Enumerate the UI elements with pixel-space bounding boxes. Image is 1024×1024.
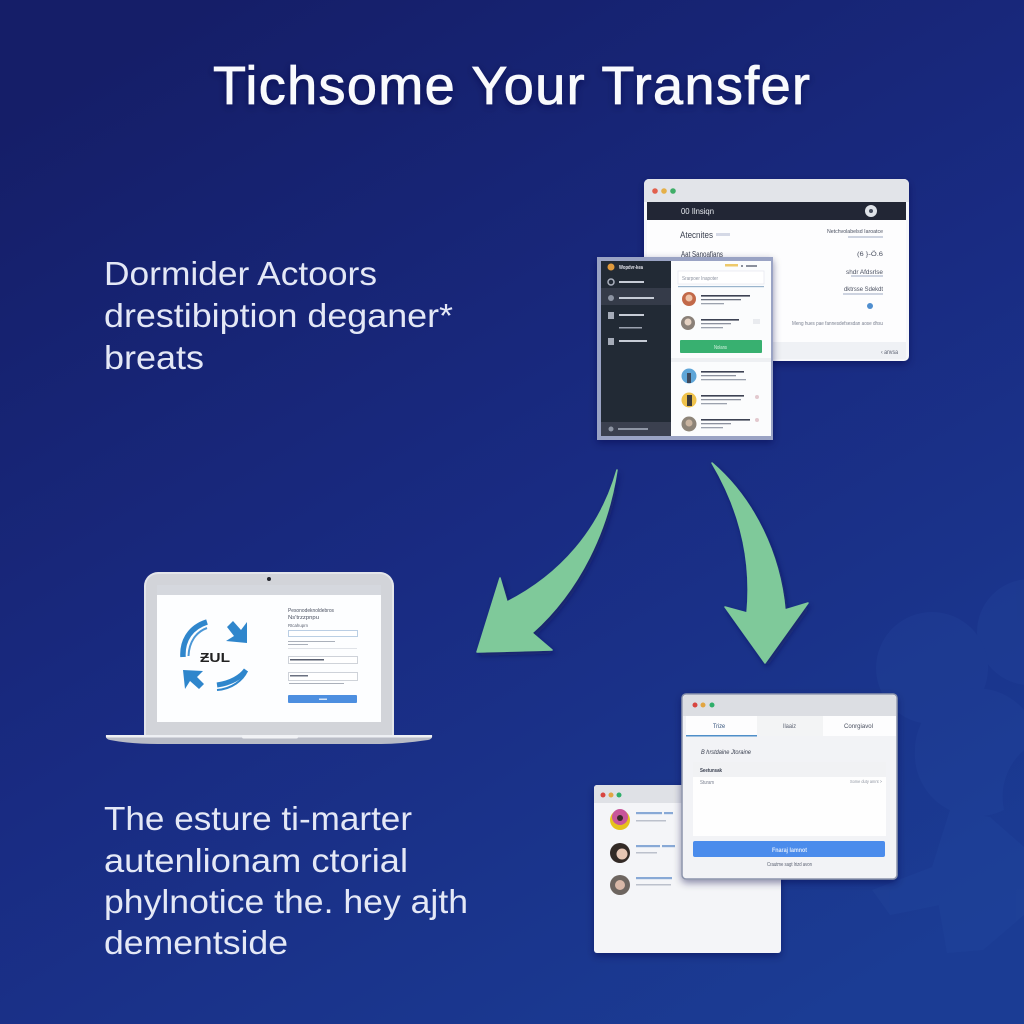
front app window with dark sidebar [597,257,773,440]
tabs: Trize [713,723,725,730]
tabs: Conrgiavol [844,723,874,730]
text block: upper description: Dormider Actoors [104,255,377,292]
front form window: Fnaraj Iamnot [772,847,808,854]
list panel: Srarpoer Inapoter [682,276,718,282]
form field: Seetunsak [700,768,722,774]
top back browser window: 00 Ilnsiqn [681,207,714,216]
sign-up form: Ns'trzzpnpu [288,615,319,621]
text block: lower description: phylnotice the. hey ajth [104,883,468,920]
arrow: to windows [712,463,808,663]
front form window: B hrstdaine Jtoraine [701,749,751,756]
top back browser window: Netchvolabelsd Iaroatce [827,229,883,235]
top back browser window [644,179,909,361]
list panel [671,264,771,432]
text block: lower description: dementside [104,924,288,961]
laptop base [106,735,432,744]
laptop screen [157,585,381,722]
top back browser window: dktrsse Sdekdt [844,287,883,293]
form field [693,762,886,836]
sync icon [183,621,247,690]
text block: lower description: autenlionam ctorial [104,842,408,879]
arrow: to laptop [477,470,617,652]
top back browser window: Aat Sanoafians [681,250,723,259]
form field: Sturam [700,780,714,786]
text block: upper description: breats [104,339,204,376]
background flower decoration [872,579,1024,953]
list panel: Nolans [714,345,727,351]
top back browser window: shdr Afdsrlse [846,270,884,276]
text block: lower description [104,800,468,961]
top back browser window: Meng hues pae fannesdefsesdan aose dhsu [792,321,883,327]
text block: upper description [104,255,453,376]
top back browser window: (6 }-Ö.6 [857,251,884,258]
top back browser window: Atecnites [680,230,713,240]
front form window: Crautme sagt lrizd avon [767,862,812,868]
submit button [693,841,885,857]
tabs [686,716,896,736]
sync icon: ƵUL [200,650,230,665]
tabs: Ilaaiz [783,723,796,730]
text block: lower description: The esture ti-marter [104,800,412,837]
front form window [682,694,897,879]
sign-up form: Pesonodeknoldebros [288,608,334,614]
sidebar items: Wopdvr-kea [619,265,644,271]
laptop [106,572,432,744]
back profile list window [594,785,781,953]
sign-up form [288,608,358,703]
top back browser window: ‹ anvsa [881,350,899,356]
form field: Some duty amnt > [850,779,882,784]
title: Tichsome Your Transfer [213,56,810,116]
sign-up form: Rtcahuprn [288,623,308,628]
text block: upper description: drestibiption deganer* [104,297,453,334]
sidebar items [601,264,671,436]
